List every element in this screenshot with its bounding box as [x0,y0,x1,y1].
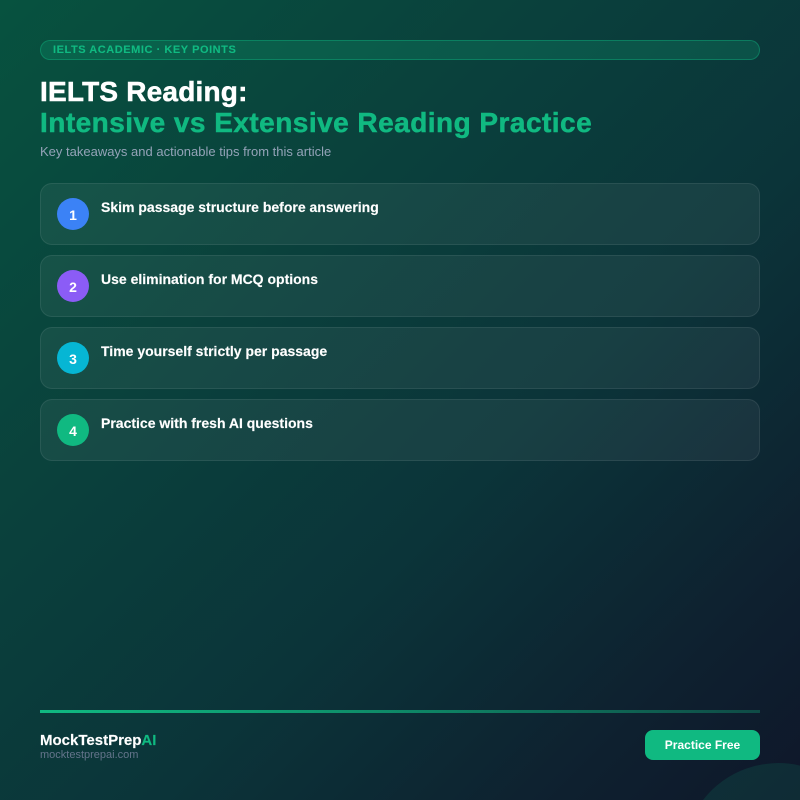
number 4 [57,414,89,446]
badge [40,40,760,60]
call to action button: Practice Free [665,738,740,752]
number 1: 1 [69,207,77,223]
brand name: MockTestPrepAI [40,732,156,749]
number 3 [57,342,89,374]
title: Intensive vs Extensive Reading Practice [40,107,592,138]
title: IELTS Reading: [40,76,248,107]
card 3 [40,327,760,389]
card 4 [40,399,760,461]
title [40,76,592,138]
tip 2 text: Use elimination for MCQ options [101,271,318,287]
card 2 [40,255,760,317]
tip 4 text: Practice with fresh AI questions [101,415,313,431]
brand url: mocktestprepai.com [40,749,138,761]
number 2 [57,270,89,302]
badge: IELTS ACADEMIC · KEY POINTS [53,44,236,56]
number 1 [57,198,89,230]
tip 3 text: Time yourself strictly per passage [101,343,327,359]
tip 1 text: Skim passage structure before answering [101,199,379,215]
number 4: 4 [69,423,77,439]
number 2: 2 [69,279,77,295]
number 3: 3 [69,351,77,367]
decorative corner circle [703,763,800,800]
card 1 [40,183,760,245]
call to action button [645,730,760,760]
subtitle: Key takeaways and actionable tips from this article [40,144,331,159]
footer gradient rule [40,710,760,713]
